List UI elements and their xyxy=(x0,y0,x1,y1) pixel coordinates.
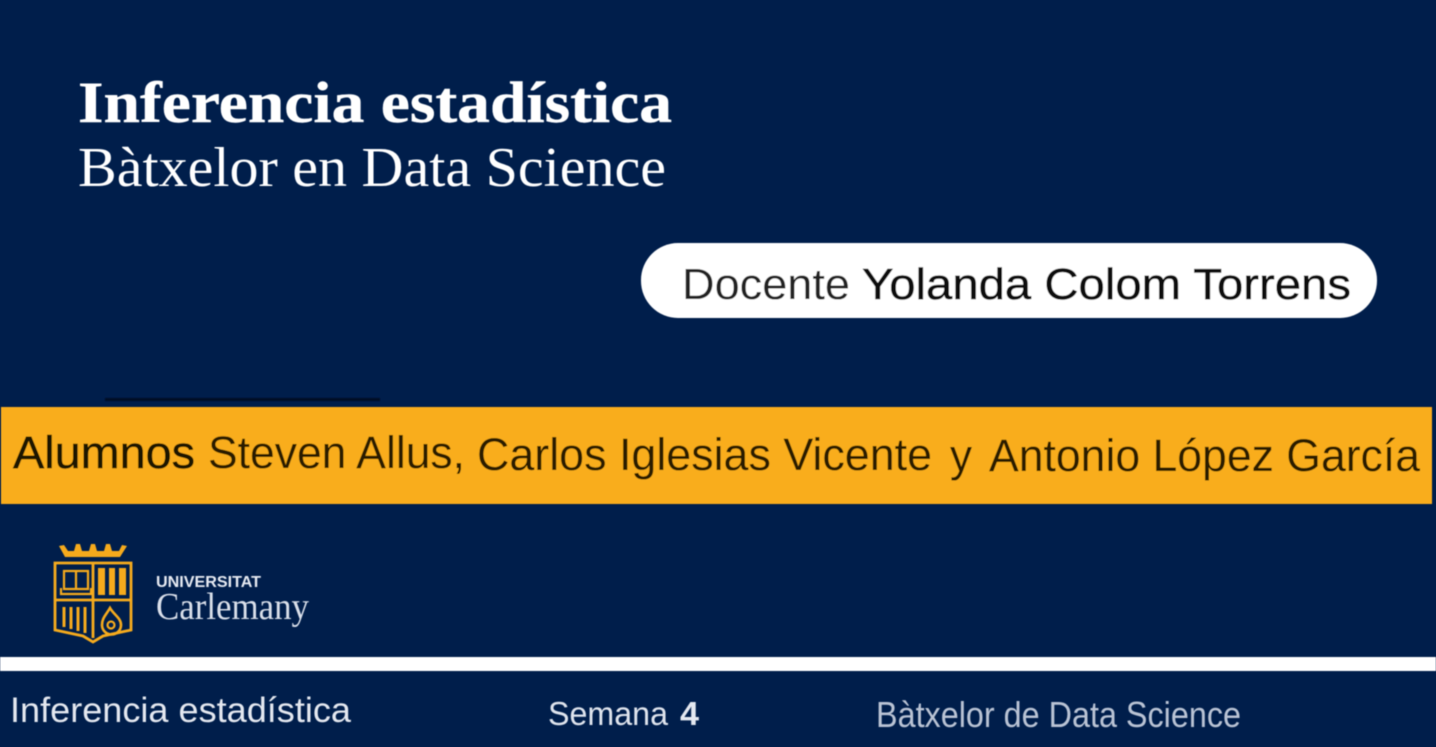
logo: Universitat Carlemany xyxy=(55,544,309,642)
teacher label: Docente xyxy=(682,260,850,309)
footer: week: 4 xyxy=(680,695,700,732)
logo word: Carlemany: Carlemany xyxy=(156,586,309,628)
icon: shield bars xyxy=(98,568,126,595)
student name: Steven Allus: Steven Allus, xyxy=(208,427,465,478)
footer: week: Semana xyxy=(548,695,669,732)
panel: teacher pill xyxy=(641,243,1377,318)
icon: crown xyxy=(59,544,127,557)
footer: degree: Bàtxelor de Data Science xyxy=(876,694,1241,735)
footer: course name: Inferencia estadística xyxy=(10,691,352,730)
icon: shield xyxy=(55,563,131,642)
panel: students band xyxy=(1,407,1432,504)
conjunction: y xyxy=(950,430,972,481)
student name: Carlos Iglesias Vicente: Carlos Iglesias Vicente xyxy=(477,429,932,480)
student name: Antonio López García: Antonio López García xyxy=(989,430,1421,481)
students label: Alumnos xyxy=(13,427,195,478)
title: Inferencia estadística xyxy=(78,70,672,135)
logo word: Universitat: UNIVERSITAT xyxy=(156,574,261,591)
teacher name: Yolanda Colom Torrens xyxy=(862,260,1351,309)
subtitle: Bàtxelor en Data Science xyxy=(78,137,666,199)
